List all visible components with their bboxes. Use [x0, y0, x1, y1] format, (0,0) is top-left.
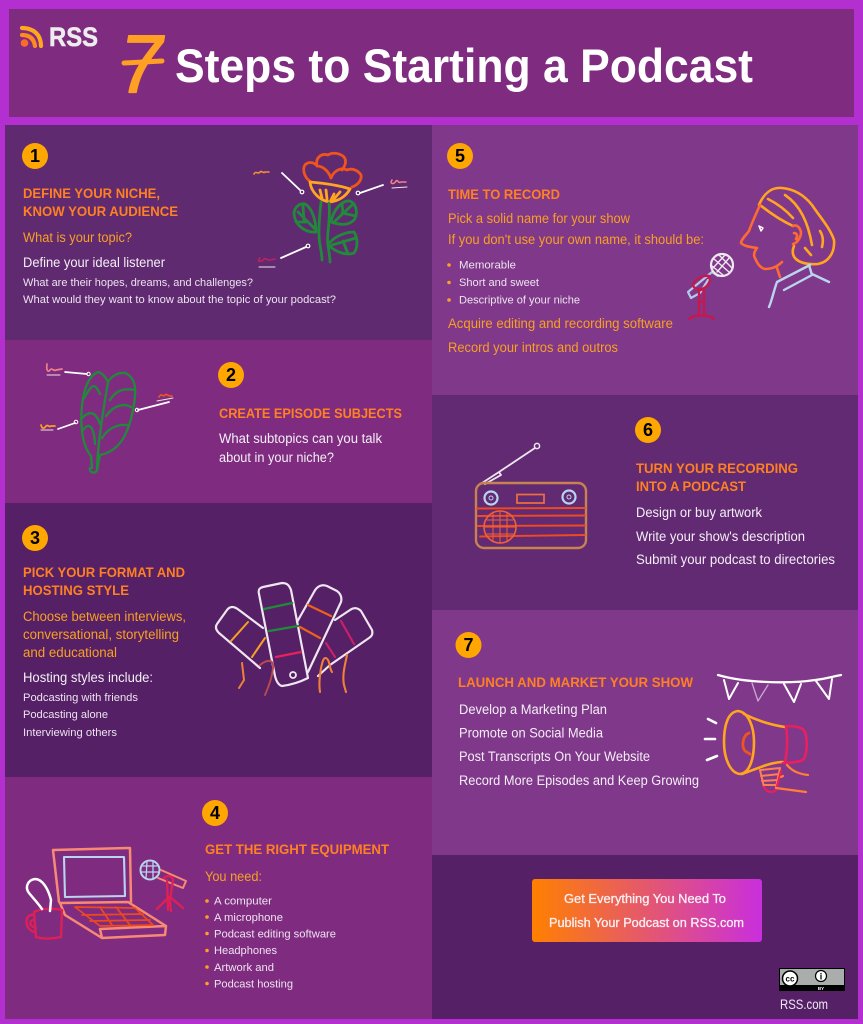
call to action button: Get Everything You Need To [564, 891, 726, 906]
creative commons badge: cc [786, 974, 795, 984]
step 4 bullet list: A microphone [214, 912, 283, 924]
step 3 badge: 3 [30, 528, 40, 548]
RSS logo [21, 22, 98, 52]
site credit: RSS.com [780, 997, 828, 1012]
step 4 bullet list: Podcast hosting [214, 978, 293, 990]
step 7 text: Record More Episodes and Keep Growing [459, 773, 699, 788]
step 5 text: Pick a solid name for your show [448, 211, 630, 226]
step 4 bullet list: Artwork and [214, 962, 274, 974]
step 6 badge: 6 [643, 420, 653, 440]
step 4 badge [202, 800, 228, 826]
step 1 heading: DEFINE YOUR NICHE, [23, 186, 160, 202]
header banner [9, 9, 854, 117]
step 4 bullet list [205, 896, 336, 990]
step 3 heading: PICK YOUR FORMAT AND [23, 565, 185, 581]
call to action button [532, 879, 762, 942]
step 5 heading: TIME TO RECORD [448, 187, 560, 203]
step 5 more text [448, 316, 673, 355]
panel: step 2 [5, 340, 432, 503]
RSS logo: RSS [49, 22, 98, 52]
step 6 text: Write your show's description [636, 529, 805, 544]
step 7 text: Promote on Social Media [459, 726, 604, 740]
step 6 heading: TURN YOUR RECORDING [636, 461, 798, 477]
icon: laptop, mug and microphone [26, 848, 186, 938]
step 1 text [23, 230, 336, 306]
step 3 text [23, 609, 186, 739]
step 1 text: What is your topic? [23, 230, 132, 245]
panel: step 7 [432, 610, 858, 855]
title: 7 [120, 19, 165, 110]
step 5 text [448, 211, 704, 247]
panel: step 1 [5, 125, 432, 340]
step 3 badge [22, 525, 48, 551]
step 4 badge: 4 [210, 803, 220, 823]
call to action button: Publish Your Podcast on RSS.com [549, 915, 744, 930]
step 3 text: Hosting styles include: [23, 670, 153, 685]
panel: step 3 [5, 503, 432, 777]
creative commons badge [779, 968, 845, 991]
step 5 bullet list: Short and sweet [459, 277, 540, 289]
icon: radio [476, 443, 586, 548]
step 2 text: What subtopics can you talk [219, 431, 382, 446]
step 3 text: and educational [23, 645, 117, 660]
panel: step 6 [432, 395, 858, 610]
step 2 heading: CREATE EPISODE SUBJECTS [219, 406, 402, 422]
step 6 text [636, 505, 835, 567]
step 2 badge [218, 362, 244, 388]
step 6 text: Design or buy artwork [636, 505, 762, 520]
step 1 text: What are their hopes, dreams, and challenges? [23, 277, 253, 289]
step 3 text: Interviewing others [23, 727, 117, 739]
step 3 text: Choose between interviews, [23, 609, 186, 624]
step 5 bullet list: Memorable [459, 260, 516, 272]
step 5 badge [447, 143, 473, 169]
step 7 heading: LAUNCH AND MARKET YOUR SHOW [458, 675, 694, 691]
step 2 text: about in your niche? [219, 450, 334, 465]
step 3 text: Podcasting with friends [23, 692, 138, 704]
step 3 text: Podcasting alone [23, 709, 108, 721]
step 2 text [219, 431, 382, 465]
step 1 heading [23, 186, 178, 220]
step 6 heading [636, 461, 798, 495]
step 7 badge [456, 632, 482, 658]
panel: step 4 [5, 777, 432, 1019]
step 7 text: Post Transcripts On Your Website [459, 749, 650, 764]
step 1 text: Define your ideal listener [23, 255, 166, 270]
panel: call to action and credits [432, 855, 858, 1019]
step 6 badge [635, 417, 661, 443]
step 1 text: What would they want to know about the topic of your podcast? [23, 294, 336, 306]
title: Steps to Starting a Podcast [175, 39, 753, 92]
step 3 heading [23, 565, 185, 599]
step 1 badge: 1 [30, 146, 40, 166]
step 7 badge: 7 [463, 635, 474, 655]
step 3 text: conversational, storytelling [23, 627, 179, 642]
step 4 bullet list: A computer [214, 896, 272, 908]
step 7 text: Develop a Marketing Plan [459, 702, 607, 717]
step 4 bullet list: Headphones [214, 945, 277, 957]
step 4 intro: You need: [205, 869, 262, 884]
step 4 bullet list: Podcast editing software [214, 928, 336, 940]
step 7 text [459, 702, 699, 788]
step 5 more text: Acquire editing and recording software [448, 316, 673, 331]
icon: flower [254, 153, 407, 267]
creative commons badge: i [820, 972, 822, 982]
title [120, 19, 753, 110]
step 1 badge [22, 143, 48, 169]
icon: person speaking into microphone [688, 188, 834, 319]
step 2 badge: 2 [226, 365, 236, 385]
panel: step 5 [432, 125, 858, 395]
icon: megaphone [705, 711, 808, 792]
step 3 heading: HOSTING STYLE [23, 583, 129, 599]
step 6 text: Submit your podcast to directories [636, 552, 835, 567]
step 5 more text: Record your intros and outros [448, 340, 618, 355]
step 6 heading: INTO A PODCAST [636, 479, 746, 495]
step 5 bullet list [447, 260, 580, 306]
icon: bunting [718, 675, 841, 702]
step 5 text: If you don't use your own name, it should be: [448, 232, 704, 247]
step 5 bullet list: Descriptive of your niche [459, 294, 580, 306]
icon: paint swatch fan [216, 583, 372, 695]
icon: leaf [41, 364, 173, 473]
step 1 heading: KNOW YOUR AUDIENCE [23, 204, 178, 220]
step 5 badge: 5 [455, 146, 465, 166]
step 4 heading: GET THE RIGHT EQUIPMENT [205, 842, 389, 858]
creative commons badge: BY [818, 986, 824, 991]
